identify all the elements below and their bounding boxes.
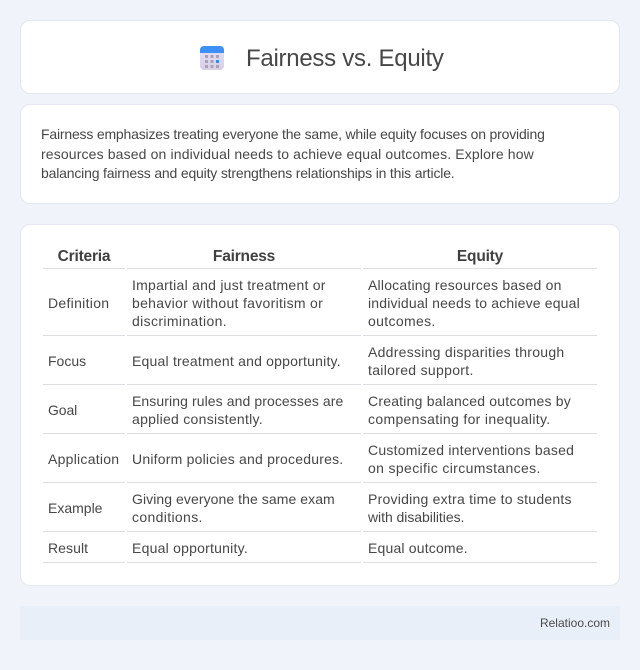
footer bar xyxy=(20,606,620,640)
intro paragraph xyxy=(41,126,545,181)
Focus equity: Addressing disparities through xyxy=(368,344,564,360)
intro paragraph: Fairness emphasizes treating everyone the same, while equity focuses on providing xyxy=(41,126,545,142)
panel: comparison table card xyxy=(20,224,620,586)
Focus equity: tailored support. xyxy=(368,362,474,378)
Application equity: Customized interventions based xyxy=(368,442,574,458)
row: Goal: Goal xyxy=(48,402,77,418)
Goal fairness: applied consistently. xyxy=(132,411,263,427)
Example equity xyxy=(368,491,572,525)
Goal equity xyxy=(368,393,571,427)
Definition equity xyxy=(368,277,580,329)
header: Criteria: Criteria xyxy=(58,248,110,265)
Application fairness: Uniform policies and procedures. xyxy=(132,451,343,467)
icon: calendar xyxy=(200,46,224,70)
Definition fairness: behavior without favoritism or xyxy=(132,295,323,311)
intro paragraph: balancing fairness and equity strengthens relationships in this article. xyxy=(41,165,455,181)
Goal equity: compensating for inequality. xyxy=(368,411,551,427)
Focus fairness: Equal treatment and opportunity. xyxy=(132,353,341,369)
header: Fairness: Fairness xyxy=(213,248,275,265)
panel: title card xyxy=(20,20,620,94)
Definition fairness xyxy=(132,277,326,329)
title: Fairness vs. Equity xyxy=(246,45,444,72)
panel: intro text xyxy=(20,104,620,204)
row: Example: Example xyxy=(48,500,102,516)
Definition fairness: Impartial and just treatment or xyxy=(132,277,326,293)
Definition equity: individual needs to achieve equal xyxy=(368,295,580,311)
Result equity: Equal outcome. xyxy=(368,540,468,556)
row: Focus: Focus xyxy=(48,353,86,369)
Application equity xyxy=(368,442,574,476)
Example equity: with disabilities. xyxy=(368,509,464,525)
Result fairness: Equal opportunity. xyxy=(132,540,248,556)
Example equity: Providing extra time to students xyxy=(368,491,572,507)
Definition fairness: discrimination. xyxy=(132,313,227,329)
row: Result: Result xyxy=(48,540,88,556)
Definition equity: outcomes. xyxy=(368,313,436,329)
header: Equity: Equity xyxy=(457,248,503,265)
Focus equity xyxy=(368,344,564,378)
Example fairness: conditions. xyxy=(132,509,203,525)
Goal fairness: Ensuring rules and processes are xyxy=(132,393,343,409)
intro paragraph: resources based on individual needs to achieve equal outcomes. Explore how xyxy=(41,146,534,162)
Example fairness xyxy=(132,491,335,525)
Application equity: on specific circumstances. xyxy=(368,460,541,476)
row: Application: Application xyxy=(48,451,119,467)
row: Definition: Definition xyxy=(48,295,109,311)
Goal fairness xyxy=(132,393,343,427)
Definition equity: Allocating resources based on xyxy=(368,277,562,293)
Example fairness: Giving everyone the same exam xyxy=(132,491,335,507)
footer credit: Relatioo.com xyxy=(540,616,610,630)
Goal equity: Creating balanced outcomes by xyxy=(368,393,571,409)
